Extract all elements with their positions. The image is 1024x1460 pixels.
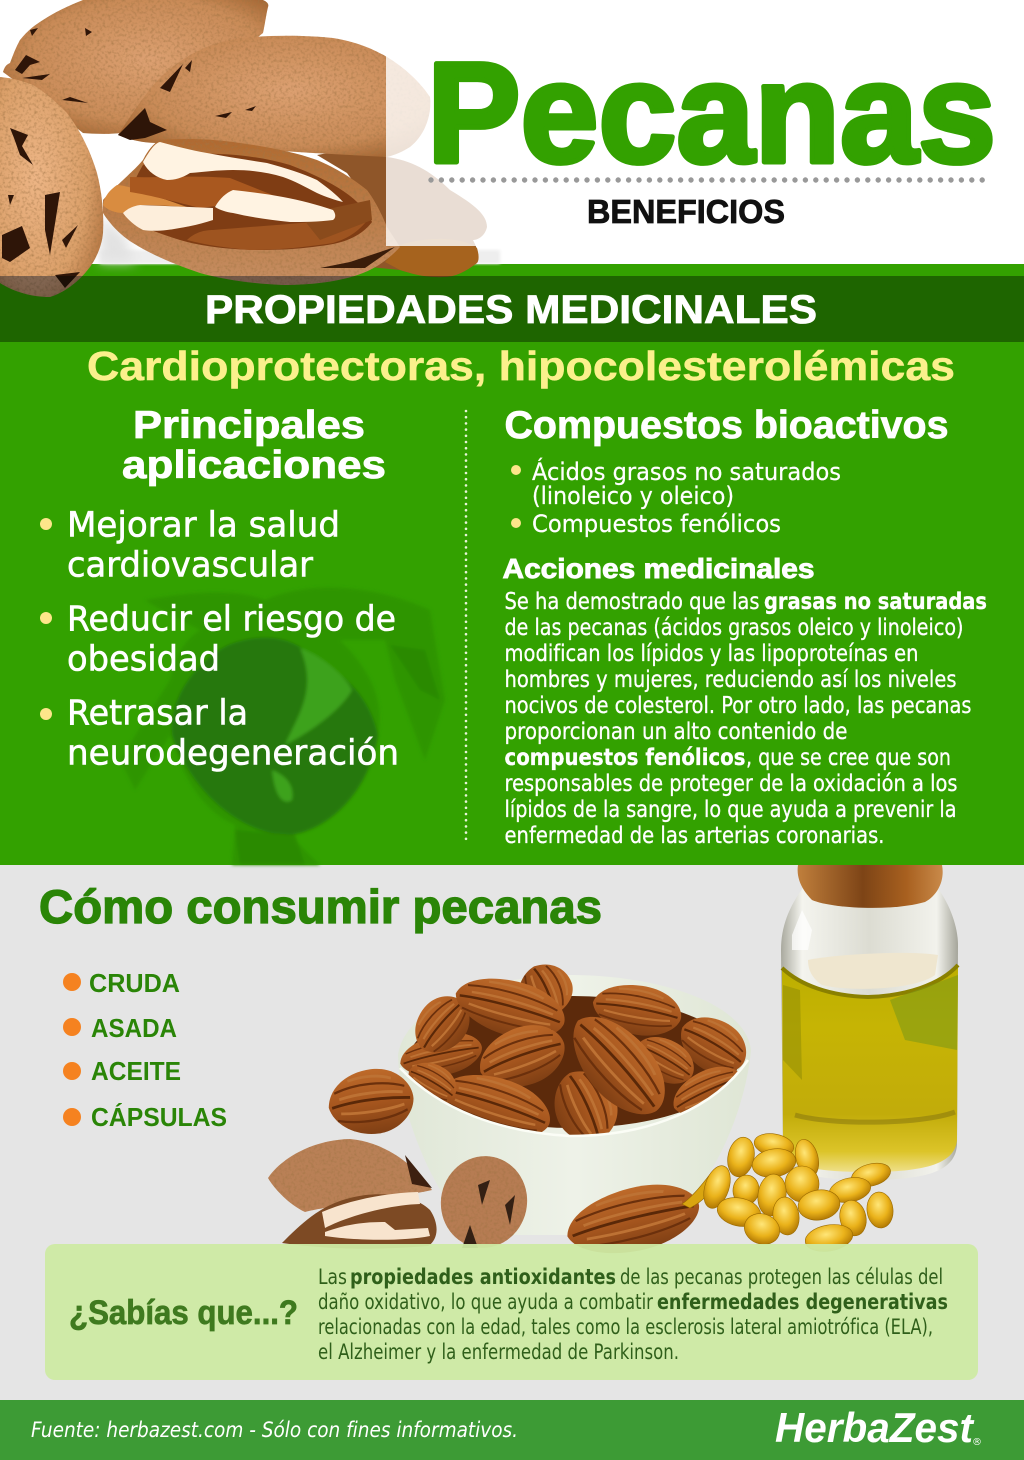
list: formas de consumo: ACEITE <box>91 1056 181 1086</box>
text block: sabias que: el Alzheimer y la enfermedad de Parkinson. <box>318 1340 679 1364</box>
heading: sabias que: ¿Sabías que...? <box>69 1294 298 1332</box>
text block: acciones medicinales <box>504 589 987 849</box>
text block: sabias que: daño oxidativo, lo que ayuda a combatir <box>318 1290 653 1314</box>
source line: Fuente: herbazest.com - Sólo con fines informativos. <box>31 1418 518 1442</box>
heading: principales aplicaciones: Principales <box>133 404 365 447</box>
middle pecan <box>118 36 430 157</box>
lower nut half <box>187 217 370 250</box>
left pecan <box>0 77 103 297</box>
text block: sabias que: propiedades antioxidantes <box>350 1265 616 1289</box>
page background: white header <box>0 0 1024 264</box>
text block: acciones medicinales: modifican los lípidos y las lipoproteínas en <box>504 641 918 667</box>
heading: compuestos bioactivos: Compuestos bioactivos <box>504 404 948 447</box>
text block: acciones medicinales: grasas no saturadas <box>764 589 987 615</box>
list: formas de consumo <box>63 968 227 1132</box>
list: aplicaciones: cardiovascular <box>67 546 314 586</box>
panel: sabias que <box>45 1244 978 1380</box>
text block: acciones medicinales: compuestos fenólicos <box>504 745 746 771</box>
image: whole and open pecans <box>268 1139 536 1256</box>
title: Pecanas: Pecanas <box>427 34 996 193</box>
image: gold capsules <box>682 1131 895 1255</box>
footer <box>0 1400 1024 1460</box>
text block: sabias que: enfermedades degenerativas <box>657 1290 948 1314</box>
subheading: cardioprotectoras: Cardioprotectoras, hipocolesterolémicas <box>87 343 955 389</box>
list: compuestos: Ácidos grasos no saturados <box>532 457 841 486</box>
list: aplicaciones: obesidad <box>67 640 220 680</box>
orange lobe <box>103 185 187 213</box>
subtitle: Beneficios: BENEFICIOS <box>587 193 785 230</box>
logo: HerbaZest: HerbaZest <box>775 1404 975 1451</box>
list: compuestos <box>511 457 841 538</box>
list: aplicaciones: Retrasar la <box>67 694 248 734</box>
text block: acciones medicinales: hombres y mujeres, reduciendo así los niveles <box>504 667 956 693</box>
image: loose pecan kernel front <box>560 1173 706 1267</box>
open half shell <box>103 139 400 285</box>
list: aplicaciones <box>40 506 399 774</box>
illustration: faded heart <box>120 588 445 865</box>
list: formas de consumo: ASADA <box>91 1013 177 1043</box>
list: compuestos: Compuestos fenólicos <box>532 510 781 538</box>
image: pecans in shell <box>0 0 520 297</box>
nuts with texture <box>0 0 430 297</box>
text block: sabias que: Las <box>318 1265 347 1289</box>
text block: acciones medicinales: , que se cree que son <box>746 745 951 771</box>
heading: principales aplicaciones: aplicaciones <box>122 444 386 487</box>
shell marks <box>2 28 256 288</box>
heading: principales aplicaciones <box>122 404 386 487</box>
text block: acciones medicinales: enfermedad de las arterias coronarias. <box>504 823 884 849</box>
heading: acciones medicinales: Acciones medicinales <box>502 553 814 584</box>
kernel behind shell <box>317 152 487 277</box>
list: aplicaciones: Mejorar la salud <box>67 506 340 546</box>
heading band: propiedades medicinales <box>0 276 1024 342</box>
back pecan <box>3 0 268 134</box>
image: bowl of pecans <box>396 955 756 1235</box>
heading: como consumir pecanas: Cómo consumir pecanas <box>39 880 602 933</box>
list: formas de consumo: CRUDA <box>89 968 180 998</box>
fading white overlay <box>386 40 520 246</box>
image: loose pecan kernel <box>324 1064 418 1140</box>
text block: acciones medicinales: Se ha demostrado que las <box>504 589 760 615</box>
dotted divider <box>431 177 990 183</box>
panel: grey consumption section <box>0 865 1024 1400</box>
list: compuestos: (linoleico y oleico) <box>532 482 734 510</box>
text block: sabias que <box>318 1265 948 1364</box>
list: aplicaciones: neurodegeneración <box>67 734 399 774</box>
text block: sabias que: de las pecanas protegen las células del <box>620 1265 943 1289</box>
text block: acciones medicinales: proporcionan un alto contenido de <box>504 719 848 745</box>
list: aplicaciones: Reducir el riesgo de <box>67 600 396 640</box>
logo mark: ® <box>972 1437 982 1448</box>
heading band: propiedades medicinales: PROPIEDADES MEDICINALES <box>205 288 817 332</box>
white kernels <box>143 142 343 202</box>
image: oil bottle <box>781 865 958 1180</box>
panel: green medicinal section <box>0 264 1024 865</box>
list: formas de consumo: CÁPSULAS <box>91 1102 227 1132</box>
